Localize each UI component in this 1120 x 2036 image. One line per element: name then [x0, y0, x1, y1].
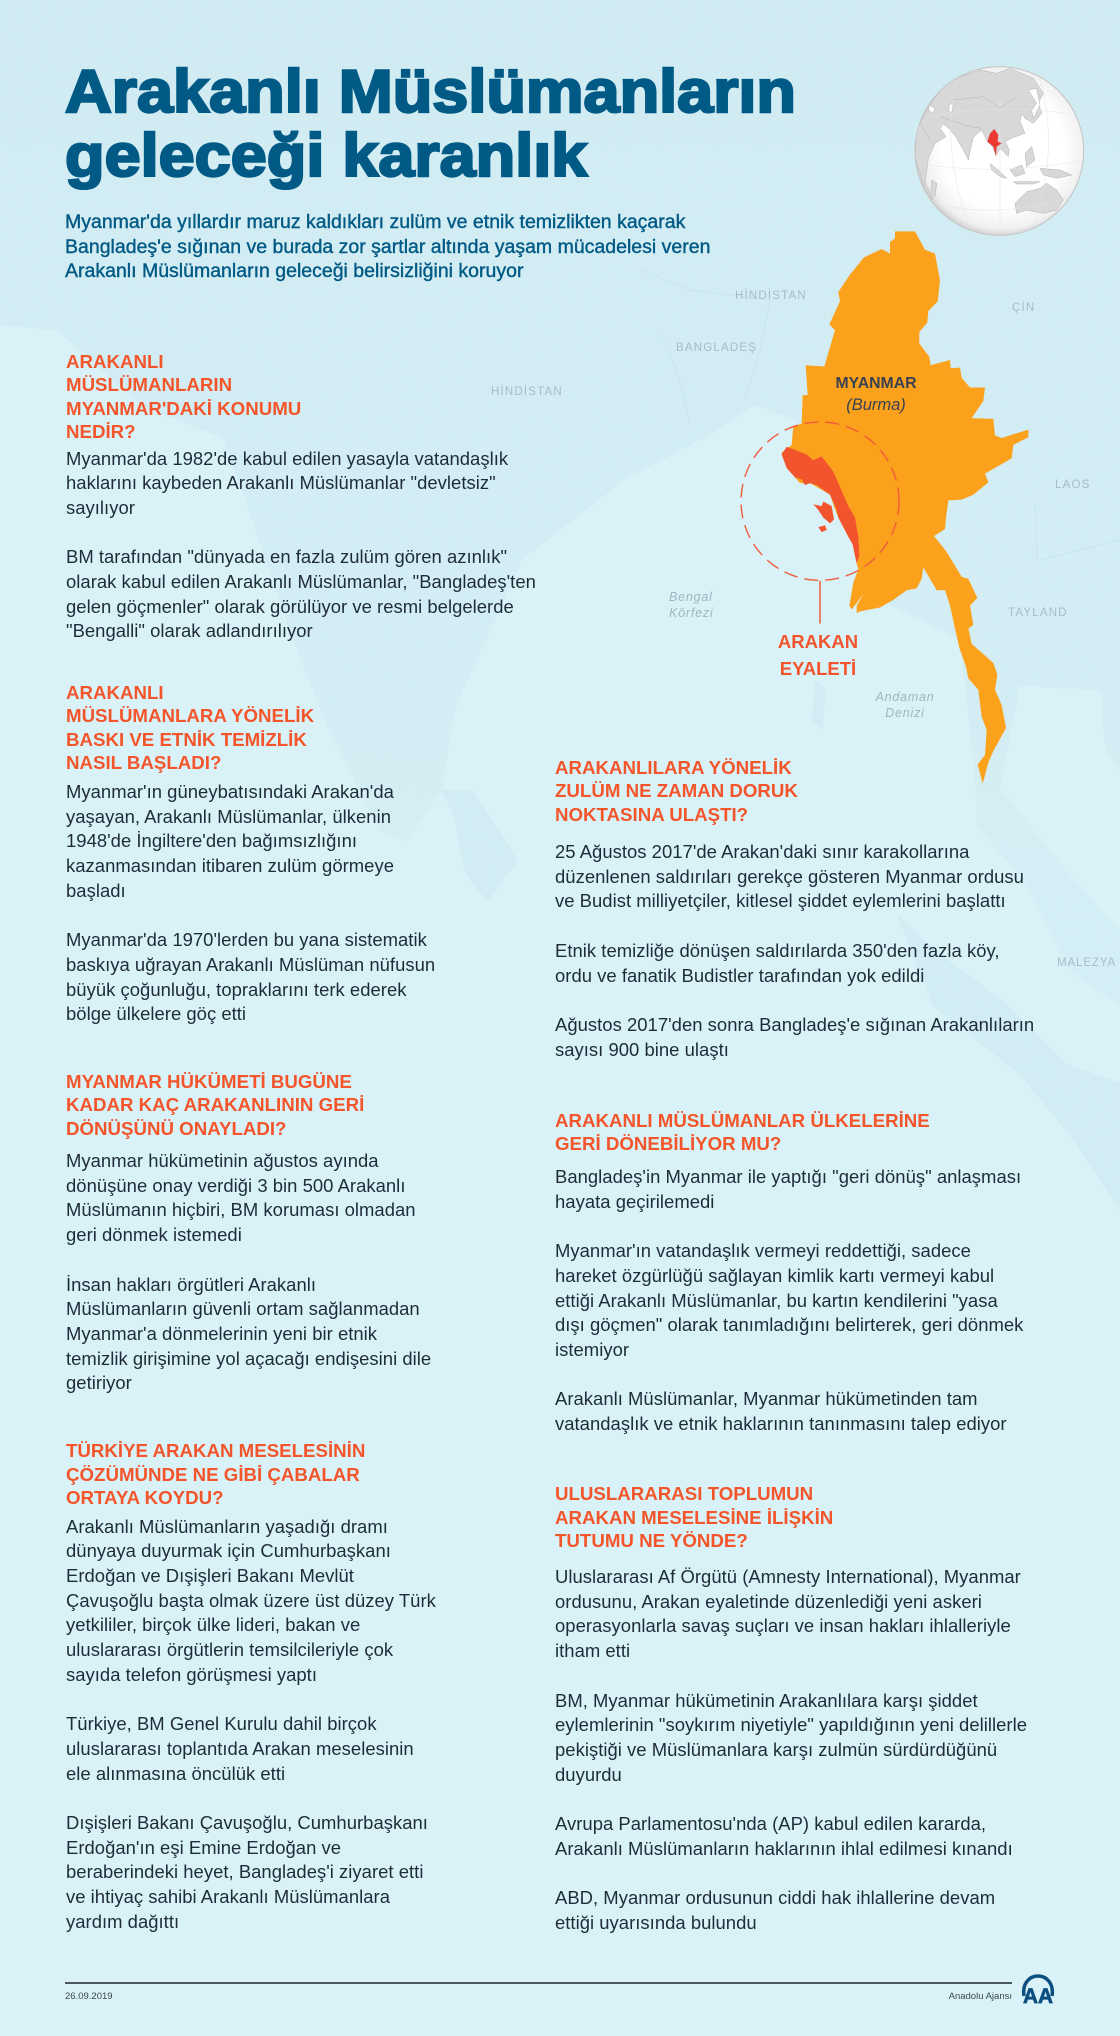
- section 3 heading: MYANMAR HÜKÜMETİ BUGÜNE: [66, 1070, 352, 1092]
- section 1 text: sayılıyor: [66, 497, 135, 518]
- section 1 text: BM tarafından "dünyada en fazla zulüm gören azınlık": [66, 546, 507, 567]
- section 4 text: yetkililer, birçok ülke lideri, bakan ve: [66, 1614, 360, 1635]
- section 7 heading: ARAKAN MESELESİNE İLİŞKİN: [555, 1506, 833, 1528]
- section 5 text: ordu ve fanatik Budistler tarafından yok edildi: [555, 965, 924, 986]
- subtitle: [64, 211, 710, 282]
- section 1 text: haklarını kaybeden Arakanlı Müslümanlar "devletsiz": [66, 472, 496, 493]
- icon: AA logo: [1022, 1974, 1054, 2004]
- section 2 text: kazanmasından itibaren zulüm görmeye: [66, 855, 394, 876]
- Myanmar shape: [782, 231, 1028, 784]
- section 2 text: Myanmar'da 1970'lerden bu yana sistematik: [66, 929, 427, 950]
- leader line: [819, 581, 821, 624]
- subtitle: Arakanlı Müslümanların geleceği belirsizliğini koruyor: [65, 260, 523, 282]
- section 6 text: hayata geçirilemedi: [555, 1191, 714, 1212]
- section 7 text: ordusunu, Arakan eyaletinde düzenlediği yeni askeri: [555, 1591, 982, 1612]
- section 6 text: [555, 1166, 1024, 1434]
- section 5 heading: NOKTASINA ULAŞTI?: [555, 804, 748, 824]
- section 5 text: düzenlenen saldırıları gerekçe gösteren Myanmar ordusu: [555, 866, 1024, 887]
- section 6 heading: [555, 1110, 930, 1154]
- label: Myanmar: MYANMAR: [835, 375, 917, 392]
- label: Laos: LAOS: [1055, 479, 1090, 491]
- label: Tayland: TAYLAND: [1008, 607, 1068, 619]
- label: Çin: ÇİN: [1012, 302, 1035, 314]
- section 1 text: Myanmar'da 1982'de kabul edilen yasayla vatandaşlık: [66, 448, 508, 468]
- section 3 text: dönüşüne onay verdiği 3 bin 500 Arakanlı: [66, 1175, 405, 1196]
- section 5 heading: ZULÜM NE ZAMAN DORUK: [555, 780, 798, 801]
- section 7 text: ettiği uyarısında bulundu: [555, 1912, 757, 1933]
- section 1 text: [66, 448, 536, 641]
- label: Andaman Denizi: Denizi: [885, 706, 925, 720]
- section 2 text: [66, 781, 435, 1024]
- section 3 text: Müslümanın hiçbiri, BM koruması olmadan: [66, 1199, 416, 1220]
- label: Bengal Körfezi: [669, 590, 714, 620]
- section 4 text: Türkiye, BM Genel Kurulu dahil birçok: [66, 1713, 377, 1734]
- section 4 text: beraberindeki heyet, Bangladeş'i ziyaret etti: [66, 1861, 423, 1882]
- section 3 text: İnsan hakları örgütleri Arakanlı: [66, 1274, 316, 1295]
- label: Arakan Eyaleti: [778, 631, 858, 679]
- section 6 text: Myanmar'ın vatandaşlık vermeyi reddettiği, sadece: [555, 1240, 971, 1261]
- section 4 text: Erdoğan'ın eşi Emine Erdoğan ve: [66, 1837, 341, 1858]
- section 1 heading: MYANMAR'DAKİ KONUMU: [66, 398, 301, 418]
- section 7 text: operasyonlarla savaş suçları ve insan hakları ihlalleriyle: [555, 1615, 1011, 1636]
- section 4 heading: TÜRKİYE ARAKAN MESELESİNİN: [66, 1440, 365, 1461]
- label: Hindistan east: HİNDİSTAN: [735, 290, 807, 302]
- section 1 text: gelen göçmenler" olarak görülüyor ve resmi belgelerde: [66, 596, 514, 617]
- section 1 text: "Bengalli" olarak adlandırılıyor: [66, 620, 313, 641]
- section 7 heading: ULUSLARARASI TOPLUMUN: [555, 1483, 813, 1504]
- section 3 text: Myanmar'a dönmelerinin yeni bir etnik: [66, 1323, 377, 1344]
- section 3 text: getiriyor: [66, 1372, 132, 1393]
- section 7 text: Uluslararası Af Örgütü (Amnesty International), Myanmar: [555, 1566, 1021, 1587]
- section 7 text: Avrupa Parlamentosu'nda (AP) kabul edilen kararda,: [555, 1813, 986, 1834]
- section 2 heading: MÜSLÜMANLARA YÖNELİK: [66, 705, 314, 726]
- section 1 heading: NEDİR?: [66, 421, 136, 442]
- label: Andaman Denizi: [875, 690, 935, 720]
- section 3 text: [66, 1150, 431, 1393]
- section 2 text: Myanmar'ın güneybatısındaki Arakan'da: [66, 781, 394, 802]
- section 6 text: dışı göçmen" olarak tanımladığını belirterek, geri dönmek: [555, 1314, 1023, 1335]
- section 6 heading: ARAKANLI MÜSLÜMANLAR ÜLKELERİNE: [555, 1110, 930, 1130]
- section 4 text: yardım dağıttı: [66, 1911, 179, 1932]
- section 5 text: Ağustos 2017'den sonra Bangladeş'e sığınan Arakanlıların: [555, 1014, 1034, 1035]
- section 5 heading: ARAKANLILARA YÖNELİK: [555, 756, 792, 778]
- section 4 text: ve ihtiyaç sahibi Arakanlı Müslümanlara: [66, 1886, 390, 1907]
- label: Bengal Körfezi: Bengal: [669, 590, 713, 604]
- section 6 text: istemiyor: [555, 1339, 629, 1360]
- section 2 heading: NASIL BAŞLADI?: [66, 752, 221, 773]
- map: Myanmar with Arakan state: [740, 231, 1028, 784]
- Myanmar on globe: [987, 129, 1002, 156]
- section 4 text: uluslararası örgütlerin temsilcileriyle çok: [66, 1639, 393, 1660]
- section 3 text: temizlik girişimine yol açacağı endişesini dile: [66, 1348, 431, 1369]
- section 3 heading: [66, 1070, 364, 1139]
- section 7 text: [555, 1566, 1027, 1933]
- section 4 heading: [66, 1440, 365, 1508]
- footer rule: [65, 1982, 1012, 1984]
- label: Burma: (Burma): [846, 396, 906, 414]
- footer source: Anadolu Ajansı: [949, 1991, 1012, 2002]
- title: Arakanlı Müslümanların: [65, 58, 796, 125]
- section 7 text: ABD, Myanmar ordusunun ciddi hak ihlallerine devam: [555, 1887, 995, 1908]
- section 2 heading: [66, 682, 314, 773]
- label: Arakan Eyaleti: EYALETİ: [780, 658, 856, 679]
- section 7 heading: [555, 1483, 833, 1551]
- section 6 text: Arakanlı Müslümanlar, Myanmar hükümetinden tam: [555, 1388, 978, 1409]
- section 2 heading: BASKI VE ETNİK TEMİZLİK: [66, 728, 307, 750]
- section 2 text: büyük çoğunluğu, topraklarını terk ederek: [66, 979, 406, 1000]
- section 3 heading: DÖNÜŞÜNÜ ONAYLADI?: [66, 1118, 286, 1138]
- section 7 text: itham etti: [555, 1640, 630, 1661]
- section 7 text: duyurdu: [555, 1764, 622, 1785]
- section 4 text: uluslararası toplantıda Arakan meselesinin: [66, 1738, 414, 1759]
- section 1 text: olarak kabul edilen Arakanlı Müslümanlar, "Bangladeş'ten: [66, 571, 536, 592]
- section 2 text: 1948'de İngiltere'den bağımsızlığını: [66, 830, 357, 851]
- section 5 text: sayısı 900 bine ulaştı: [555, 1039, 729, 1060]
- section 5 heading: [555, 756, 798, 825]
- section 2 text: baskıya uğrayan Arakanlı Müslüman nüfusun: [66, 954, 435, 975]
- section 5 text: [555, 841, 1034, 1060]
- section 3 heading: KADAR KAÇ ARAKANLININ GERİ: [66, 1094, 364, 1115]
- section 5 text: ve Budist milliyetçiler, kitlesel şiddet eylemlerini başlattı: [555, 890, 1006, 911]
- label: Arakan Eyaleti: ARAKAN: [778, 631, 858, 652]
- section 3 text: Müslümanların güvenli ortam sağlanmadan: [66, 1298, 420, 1319]
- section 1 heading: [66, 350, 301, 442]
- section 7 text: eylemlerinin "soykırım niyetiyle" yapıldığının yeni delillerle: [555, 1714, 1027, 1735]
- section 4 text: Arakanlı Müslümanların yaşadığı dramı: [66, 1516, 388, 1536]
- footer date: 26.09.2019: [65, 1991, 113, 2002]
- section 7 text: BM, Myanmar hükümetinin Arakanlılara karşı şiddet: [555, 1690, 978, 1711]
- label: Hindistan west: HİNDİSTAN: [491, 386, 563, 398]
- section 4 text: sayıda telefon görüşmesi yaptı: [66, 1664, 317, 1685]
- section 6 text: ettiği Arakanlı Müslümanlar, bu kartın kendilerini "yasa: [555, 1290, 998, 1311]
- Arakan state shape: [782, 447, 859, 564]
- section 1 heading: MÜSLÜMANLARIN: [66, 374, 232, 395]
- section 4 text: Erdoğan ve Dışişleri Bakanı Mevlüt: [66, 1565, 354, 1586]
- section 4 text: Dışişleri Bakanı Çavuşoğlu, Cumhurbaşkanı: [66, 1812, 428, 1833]
- section 2 heading: ARAKANLI: [66, 682, 164, 702]
- label: Bengal Körfezi: Körfezi: [669, 606, 714, 620]
- label: Bangladeş: BANGLADEŞ: [676, 342, 757, 354]
- title: [64, 58, 796, 190]
- section 6 text: hareket özgürlüğü sağlayan kimlik kartı vermeyi kabul: [555, 1265, 994, 1286]
- section 6 heading: GERİ DÖNEBİLİYOR MU?: [555, 1133, 781, 1154]
- globe locator: [914, 66, 1084, 236]
- section 1 heading: ARAKANLI: [66, 350, 164, 372]
- section 4 text: [66, 1516, 436, 1932]
- section 7 heading: TUTUMU NE YÖNDE?: [555, 1530, 748, 1551]
- section 4 text: ele alınmasına öncülük etti: [66, 1763, 285, 1784]
- section 2 text: bölge ülkelere göç etti: [66, 1003, 246, 1024]
- section 6 text: vatandaşlık ve etnik haklarının tanınmasını talep ediyor: [555, 1413, 1007, 1434]
- section 3 text: geri dönmek istemedi: [66, 1224, 242, 1245]
- section 5 text: 25 Ağustos 2017'de Arakan'daki sınır karakollarına: [555, 841, 969, 862]
- section 2 text: başladı: [66, 880, 126, 901]
- section 6 text: Bangladeş'in Myanmar ile yaptığı "geri dönüş" anlaşması: [555, 1166, 1021, 1187]
- section 4 heading: ORTAYA KOYDU?: [66, 1487, 223, 1508]
- section 3 text: Myanmar hükümetinin ağustos ayında: [66, 1150, 379, 1171]
- section 4 text: dünyaya duyurmak için Cumhurbaşkanı: [66, 1540, 391, 1561]
- section 7 text: pekiştiği ve Müslümanlara karşı zulmün sürdürdüğünü: [555, 1739, 997, 1760]
- subtitle: Bangladeş'e sığınan ve burada zor şartlar altında yaşam mücadelesi veren: [65, 236, 710, 258]
- section 7 text: Arakanlı Müslümanların haklarının ihlal edilmesi kınandı: [555, 1838, 1013, 1859]
- section 2 text: yaşayan, Arakanlı Müslümanlar, ülkenin: [66, 806, 391, 827]
- label: Malezya: MALEZYA: [1057, 957, 1116, 969]
- title: geleceği karanlık: [65, 122, 587, 189]
- subtitle: Myanmar'da yıllardır maruz kaldıkları zulüm ve etnik temizlikten kaçarak: [65, 211, 685, 233]
- label: Andaman Denizi: Andaman: [875, 690, 935, 704]
- dashed circle: [741, 422, 899, 580]
- section 4 heading: ÇÖZÜMÜNDE NE GİBİ ÇABALAR: [66, 1464, 360, 1484]
- section 4 text: Çavuşoğlu başta olmak üzere üst düzey Türk: [66, 1590, 436, 1611]
- section 5 text: Etnik temizliğe dönüşen saldırılarda 350'den fazla köy,: [555, 940, 1000, 961]
